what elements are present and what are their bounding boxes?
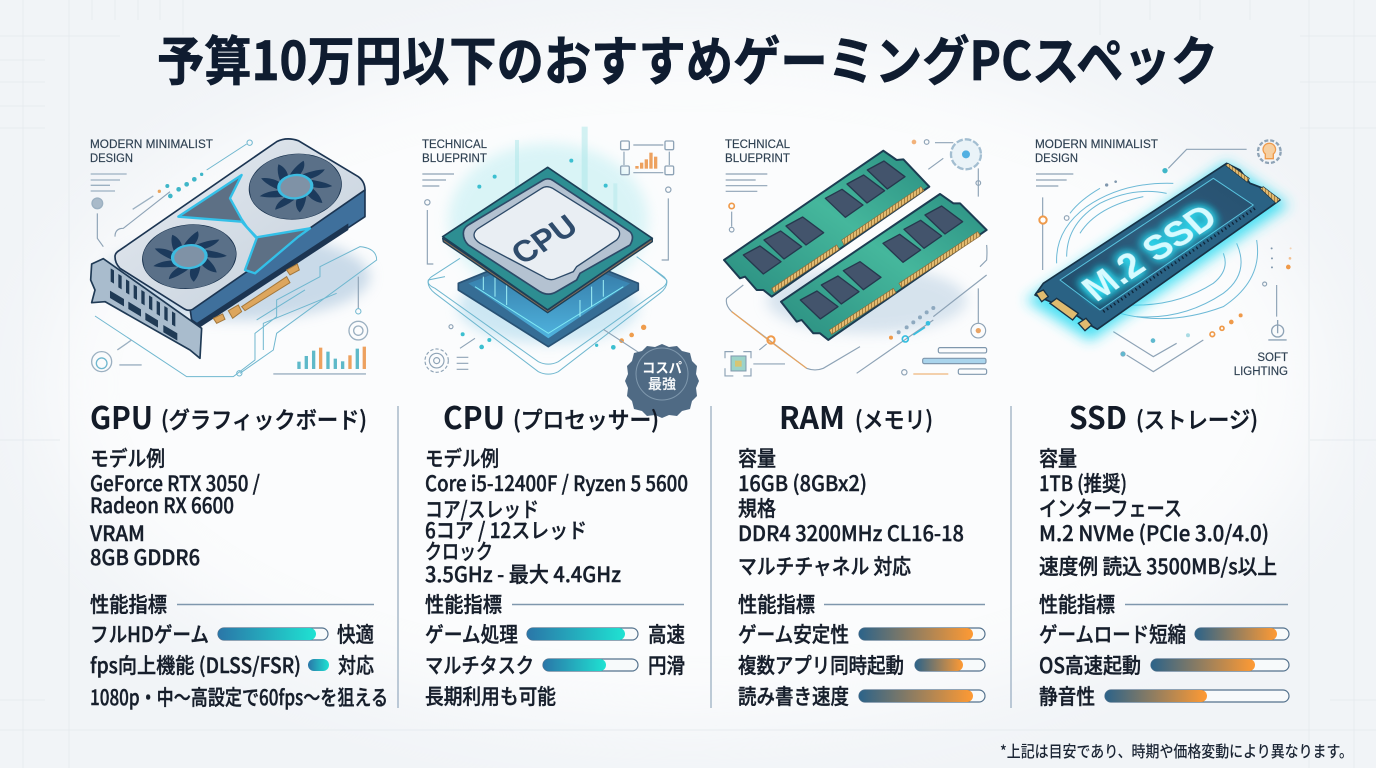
spec text: RAM: DDR4 3200MHz CL16-18 <box>738 518 964 548</box>
spec text: SSD: M.2 NVMe (PCIe 3.0/4.0) <box>1039 518 1269 548</box>
performance metrics: RAM: ゲーム安定性 <box>738 619 849 649</box>
badge: コスパ最強: コスパ <box>642 358 682 378</box>
performance metrics: CPU <box>425 589 685 711</box>
performance metrics: CPU: 性能指標 <box>425 589 502 619</box>
performance metrics: SSD: 静音性 <box>1039 681 1095 711</box>
design label line 2: DESIGN <box>1035 153 1078 165</box>
spec text: GPU: Radeon RX 6600 <box>90 490 234 520</box>
spec text: GPU: VRAM <box>89 518 145 548</box>
performance metrics: GPU <box>90 589 388 712</box>
blueprint label: TECHNICAL <box>725 139 791 151</box>
spec text: CPU: コア/スレッド <box>425 494 539 524</box>
card top <box>115 139 365 310</box>
spec text: SSD: 速度例 読込 3500MB/s以上 <box>1039 551 1277 581</box>
illustration: M.2 SSD <box>1035 140 1292 372</box>
heading: CPU: (プロセッサー) <box>513 401 659 435</box>
card side <box>190 190 365 326</box>
divider <box>398 406 1011 708</box>
spec text: RAM: マルチチャネル 対応 <box>738 551 911 581</box>
heading: CPU <box>443 393 659 438</box>
spec text: CPU <box>425 443 688 589</box>
spec text: SSD: インターフェース <box>1039 493 1182 523</box>
spec text: CPU: Core i5-12400F / Ryzen 5 5600 <box>425 468 688 498</box>
performance metrics: CPU: 高速 <box>648 619 685 649</box>
blueprint label line 2: BLUEPRINT <box>422 153 487 165</box>
performance metrics: GPU: 快適 <box>337 619 374 649</box>
design label: MODERN MINIMALIST <box>90 139 213 151</box>
heading: CPU: CPU <box>443 393 505 438</box>
heading: GPU <box>90 393 367 438</box>
badge: コスパ最強 <box>625 344 699 418</box>
heading: SSD: SSD <box>1069 393 1127 438</box>
stick 2 <box>781 194 987 340</box>
panel: GPU <box>89 137 388 712</box>
heading: GPU: GPU <box>90 393 153 438</box>
spec text: GPU: GeForce RTX 3050 / <box>90 468 260 498</box>
stick 1 <box>724 151 929 297</box>
heading: RAM: (メモリ) <box>855 401 933 435</box>
performance metrics: SSD: OS高速起動 <box>1039 650 1141 680</box>
design label line 2: DESIGN <box>90 153 133 165</box>
panel: CPU <box>422 127 699 711</box>
design label: MODERN MINIMALIST <box>1035 139 1158 151</box>
spec text: GPU: 8GB GDDR6 <box>90 542 200 572</box>
spec text: GPU: モデル例 <box>90 443 165 473</box>
illustration: processor <box>422 127 674 374</box>
performance metrics: SSD: 性能指標 <box>1039 589 1115 619</box>
performance metrics: GPU: 対応 <box>338 650 374 680</box>
CPU chip lettering: CPU <box>504 208 584 271</box>
performance metrics: CPU: ゲーム処理 <box>425 619 518 649</box>
panel: RAM <box>724 139 987 711</box>
blueprint label: TECHNICAL <box>422 139 488 151</box>
performance metrics: GPU: フルHDゲーム <box>90 619 209 649</box>
performance metrics: SSD <box>1039 589 1289 711</box>
soft lighting label <box>1234 352 1288 378</box>
soft lighting label: LIGHTING <box>1234 366 1288 378</box>
heading: SSD: (ストレージ) <box>1136 401 1258 435</box>
spec text: CPU: モデル例 <box>425 443 499 473</box>
performance metrics: RAM: 複数アプリ同時起動 <box>738 650 904 680</box>
title: 予算10万円以下のおすすめゲーミングPCスペック <box>157 20 1218 96</box>
performance metrics: CPU: 長期利用も可能 <box>425 681 556 711</box>
performance metrics: GPU: fps向上機能 (DLSS/FSR) <box>90 650 301 680</box>
performance metrics: RAM: 読み書き速度 <box>738 681 849 711</box>
soft lighting label: SOFT <box>1257 352 1288 364</box>
spec text: RAM <box>738 443 964 581</box>
spec text: RAM: 容量 <box>738 443 776 473</box>
performance metrics: CPU: 円滑 <box>648 650 685 680</box>
spec text: CPU: 3.5GHz - 最大 4.4GHz <box>425 559 621 589</box>
spec text: CPU: クロック <box>425 536 493 566</box>
bracket <box>91 259 202 358</box>
spec text: SSD: 1TB (推奨) <box>1039 468 1127 498</box>
performance metrics: GPU: 1080p・中〜高設定で60fps〜を狙える <box>90 682 388 712</box>
SSD glowing lettering: M.2 SSD <box>1073 196 1225 309</box>
performance metrics: SSD: ゲームロード短縮 <box>1039 619 1186 649</box>
illustration: graphics card <box>91 137 377 377</box>
heading: GPU: (グラフィックボード) <box>161 401 367 435</box>
illustration: memory modules <box>724 139 987 376</box>
spec text: RAM: 16GB (8GBx2) <box>738 468 867 498</box>
blueprint label line 2: BLUEPRINT <box>725 153 790 165</box>
heading: RAM <box>779 393 933 438</box>
performance metrics: CPU: マルチタスク <box>425 650 534 680</box>
spec text: SSD <box>1039 443 1277 581</box>
spec text: SSD: 容量 <box>1039 443 1077 473</box>
spec text: GPU <box>89 443 260 572</box>
performance metrics: RAM <box>738 589 985 711</box>
performance metrics: GPU: 性能指標 <box>90 589 167 619</box>
panel: SSD <box>1035 139 1292 711</box>
badge: コスパ最強: 最強 <box>648 374 676 394</box>
spec text: RAM: 規格 <box>738 493 776 523</box>
performance metrics: RAM: 性能指標 <box>738 589 815 619</box>
heading: RAM: RAM <box>779 393 845 438</box>
spec text: CPU: 6コア / 12スレッド <box>425 515 587 545</box>
heading: SSD <box>1069 393 1258 438</box>
